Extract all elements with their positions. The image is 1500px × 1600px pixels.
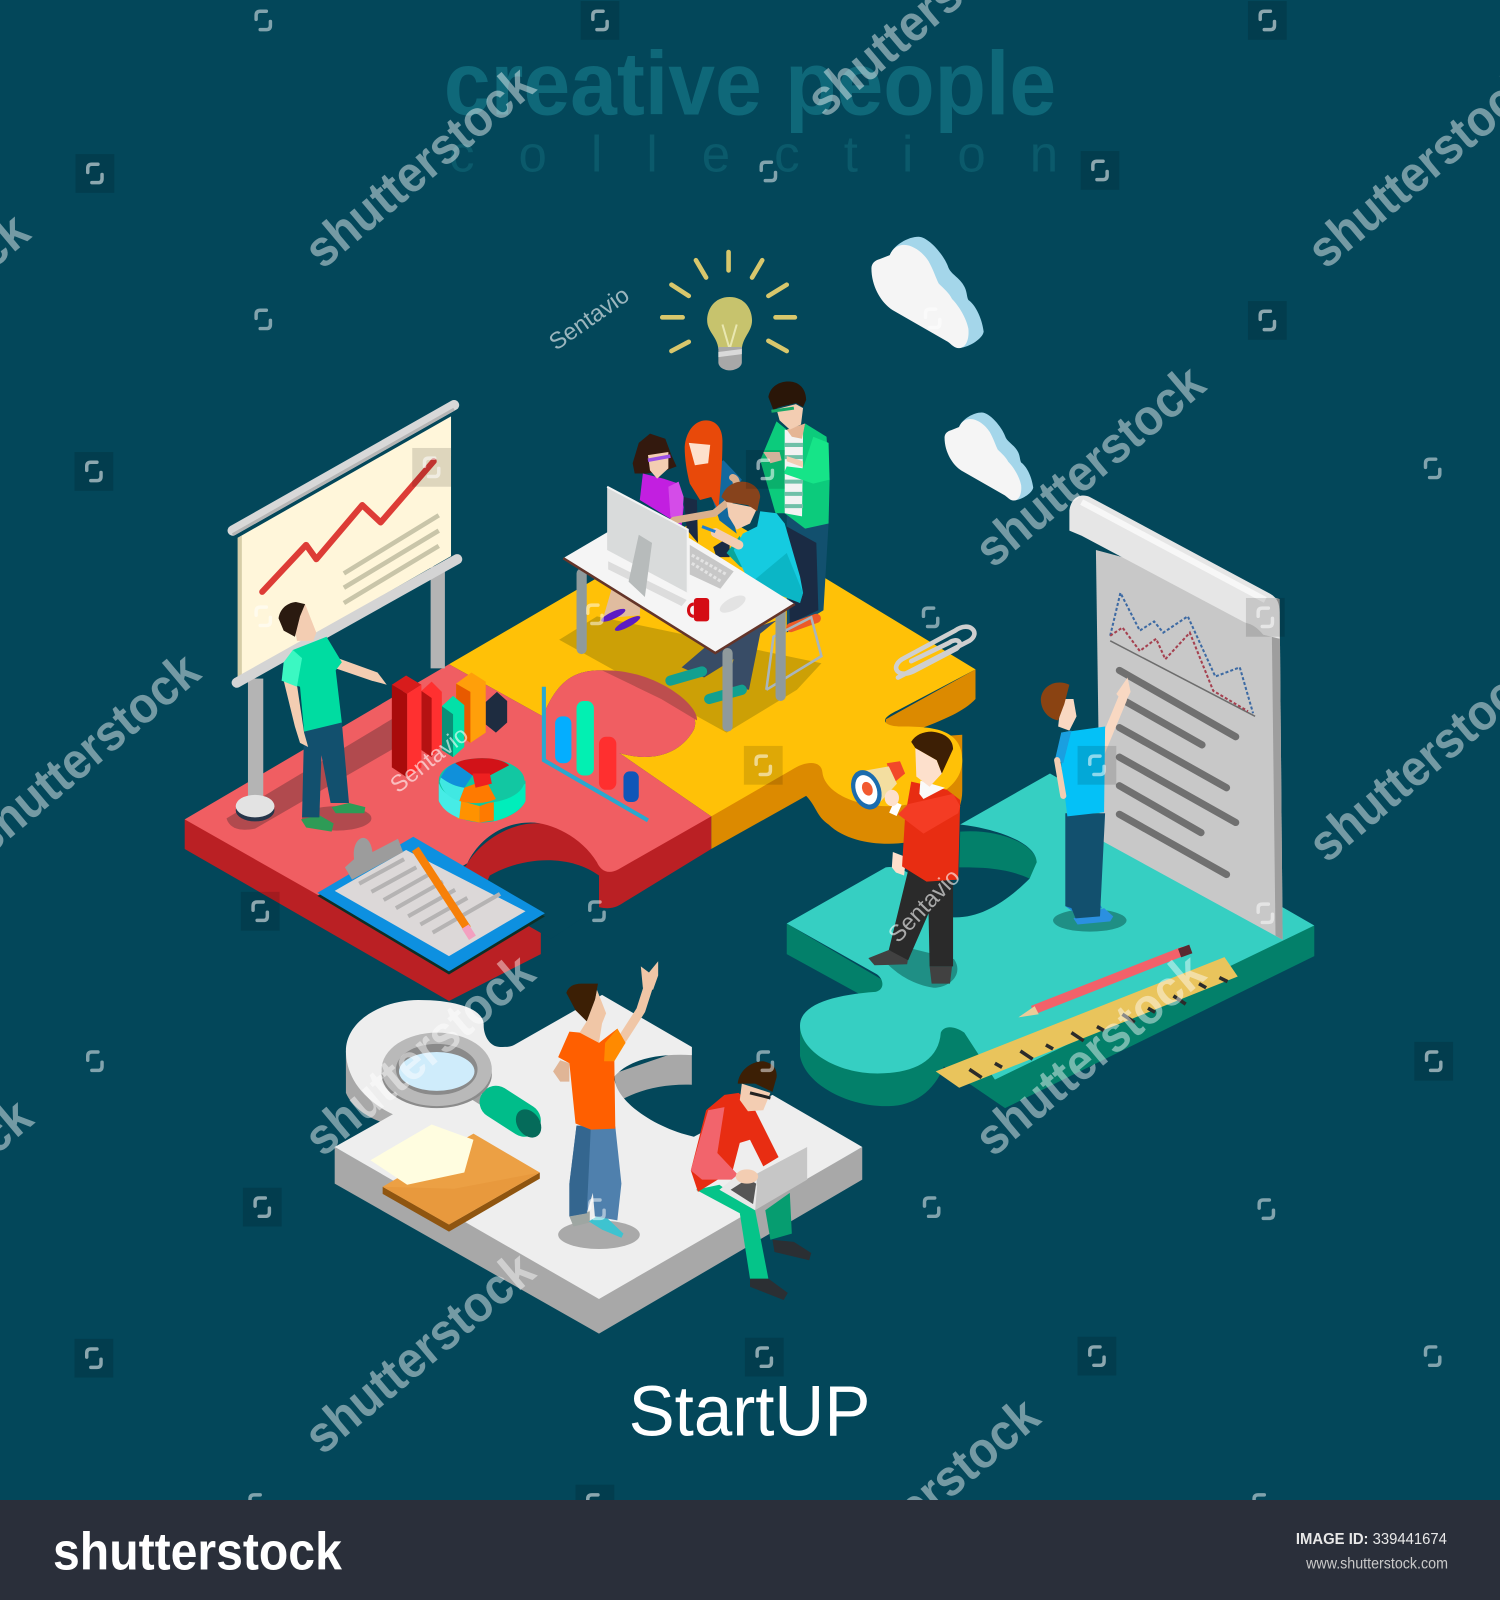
icon: light bulb [662,252,795,370]
second red bar [421,682,442,757]
piece side [335,1147,862,1334]
arm front [1057,760,1063,796]
chair back [787,527,818,623]
shoe [791,618,816,628]
desk scene [563,382,830,727]
icon: small cloud [945,413,1033,501]
paper [335,850,526,956]
paper clip [896,627,974,678]
notch wall [939,822,1039,918]
seat [684,497,698,543]
glasses [750,1093,770,1098]
face [727,502,757,530]
pants [787,513,829,633]
neck [787,423,805,439]
envelope [370,1124,540,1232]
red cylinder [599,737,616,790]
desk legs [577,573,587,649]
watermark credits: Sentavio [385,721,473,798]
striped shirt [785,430,803,516]
hair [721,482,760,511]
handle [471,1094,488,1104]
top rail [233,405,454,531]
blue dotted series [1110,593,1253,713]
arm front [284,681,308,747]
footer bar [0,1500,1500,1600]
arm [898,794,960,834]
front leg [696,1185,768,1279]
hair [911,732,953,773]
person with megaphone [845,732,960,984]
axis [1110,641,1255,716]
shirt [1061,727,1105,816]
raised arm [622,985,649,1039]
watermark text: shutterstock [293,942,545,1166]
hand [715,533,739,545]
image id: IMAGE ID: 339441674 [1296,1531,1447,1548]
hoodie [734,511,803,603]
watermark text: shutterstock [964,942,1216,1166]
shoes [600,606,627,624]
hair [738,1061,777,1092]
front desk leg [723,653,733,727]
collar [919,781,945,799]
sheet [1096,550,1283,940]
tab side [711,735,962,849]
jacket right [785,423,830,529]
ring [382,1041,492,1108]
hair [279,602,305,637]
left pole [248,679,263,806]
line chart [262,461,434,592]
hand [892,852,906,876]
raised hand [641,961,658,990]
sweater [902,782,960,882]
top [439,758,524,803]
shoes [772,1240,811,1260]
woman with red hair [673,420,742,557]
desk shadow [559,616,821,733]
glasses [771,408,794,411]
man shadow [1053,909,1127,932]
person at scroll [1041,678,1131,924]
face [295,604,316,641]
body [640,473,684,526]
piece side [787,923,1314,1108]
megaphone [845,761,905,814]
face [777,404,803,430]
monitor [607,487,688,593]
pole base [236,799,274,821]
crescent side [886,669,976,731]
pants [1065,813,1105,918]
shoes [868,950,908,965]
piece top [185,664,711,969]
pants [889,870,953,966]
hair [566,984,598,1021]
top [703,460,742,534]
clipboard [317,837,545,974]
person presenting [279,602,387,832]
laptop [755,1147,807,1210]
notch wall [614,1047,692,1102]
text lines [359,859,500,933]
big red bar [392,676,421,694]
head [1058,699,1077,731]
navy cylinder [623,771,639,802]
hoodie [691,1093,779,1192]
seated man in hoodie [670,482,803,699]
bottom rail [237,559,457,683]
pencil [415,849,467,929]
piece top [787,773,1314,1080]
back leg [765,1193,792,1240]
person shadow [558,1220,640,1249]
panel: white puzzle piece [335,995,862,1334]
sleeve [784,437,830,484]
text lines [1119,670,1236,874]
blue cylinder [555,716,571,763]
mouse [717,592,748,616]
person with orange shirt [553,961,658,1238]
glasses [648,456,670,460]
face [740,1084,770,1111]
standing man in green jacket [760,382,830,633]
text lines [344,515,439,603]
paper scroll [1069,496,1283,940]
ruler [936,957,1238,1088]
frame [317,837,545,971]
shirt [558,1029,626,1130]
lens [399,1052,474,1091]
overlap shadow [602,670,697,720]
hair [685,420,722,510]
face [580,990,606,1043]
icon: large cloud [871,237,984,348]
face [648,452,668,479]
watermark credits: Sentavio [883,864,965,947]
axes [544,687,648,820]
face [915,748,942,787]
monitor stand [608,561,687,606]
shirt [282,637,342,732]
orange bar [456,672,486,743]
chair frame [766,617,821,690]
notch wall [449,823,612,898]
watermark text: shutterstock [293,1240,545,1464]
green bar [442,696,464,757]
clip [345,838,403,880]
piece top [335,995,862,1299]
red dotted series [1110,628,1248,711]
watermark credits [385,281,965,947]
pants [569,1126,621,1220]
panel: yellow puzzle piece [449,510,976,849]
roll [1069,496,1280,639]
board [238,416,451,679]
watermark text: shutterstock [964,353,1216,578]
pencil on teal [1018,949,1191,1017]
piece side [185,816,711,1001]
footer logo: shutterstock [53,1522,342,1581]
hair [633,434,677,473]
side [439,781,526,822]
title [444,34,1058,182]
sleeve [604,1029,626,1061]
legs [302,722,349,817]
arm back [336,658,387,685]
person shadow [227,714,400,830]
pen [702,527,715,532]
whiteboard [233,405,457,821]
panel: red puzzle piece [185,664,711,1001]
arm [673,478,736,520]
donut pie chart [439,758,526,822]
shoes [1065,898,1102,914]
heading: creative people: creative people [444,34,1056,134]
raised arm [1100,699,1122,753]
3D bar chart [392,672,507,778]
green cylinder [577,701,594,776]
person with laptop [691,1061,811,1300]
watermark text: shutterstock [293,54,545,279]
shoes [569,1211,590,1227]
subheading: collection: collection [449,125,1058,182]
dark bar [486,692,507,733]
piece top [449,510,976,816]
undershirt [727,536,750,571]
right pole [431,566,445,668]
cylinder chart [544,687,648,820]
back arm [553,1060,569,1082]
hand [736,1169,758,1184]
face [689,443,710,465]
note paper [370,1124,473,1185]
sleeve [691,1107,737,1180]
keyboard [690,545,734,589]
desk top [563,510,795,653]
mug [694,598,709,621]
chart title: StartUP: StartUP [629,1372,870,1452]
woman in purple [600,434,684,633]
hair [768,382,806,410]
shoes [670,671,702,681]
shoes [301,815,334,832]
hands [763,452,782,463]
hand on megaphone [885,790,899,806]
site url: www.shutterstock.com [1305,1555,1448,1572]
panel: teal puzzle piece [787,773,1314,1108]
jacket left [760,421,787,513]
watermark credits: Sentavio [544,281,634,355]
magnifying glass [382,1033,547,1142]
legs [603,587,641,618]
legs [682,620,777,690]
